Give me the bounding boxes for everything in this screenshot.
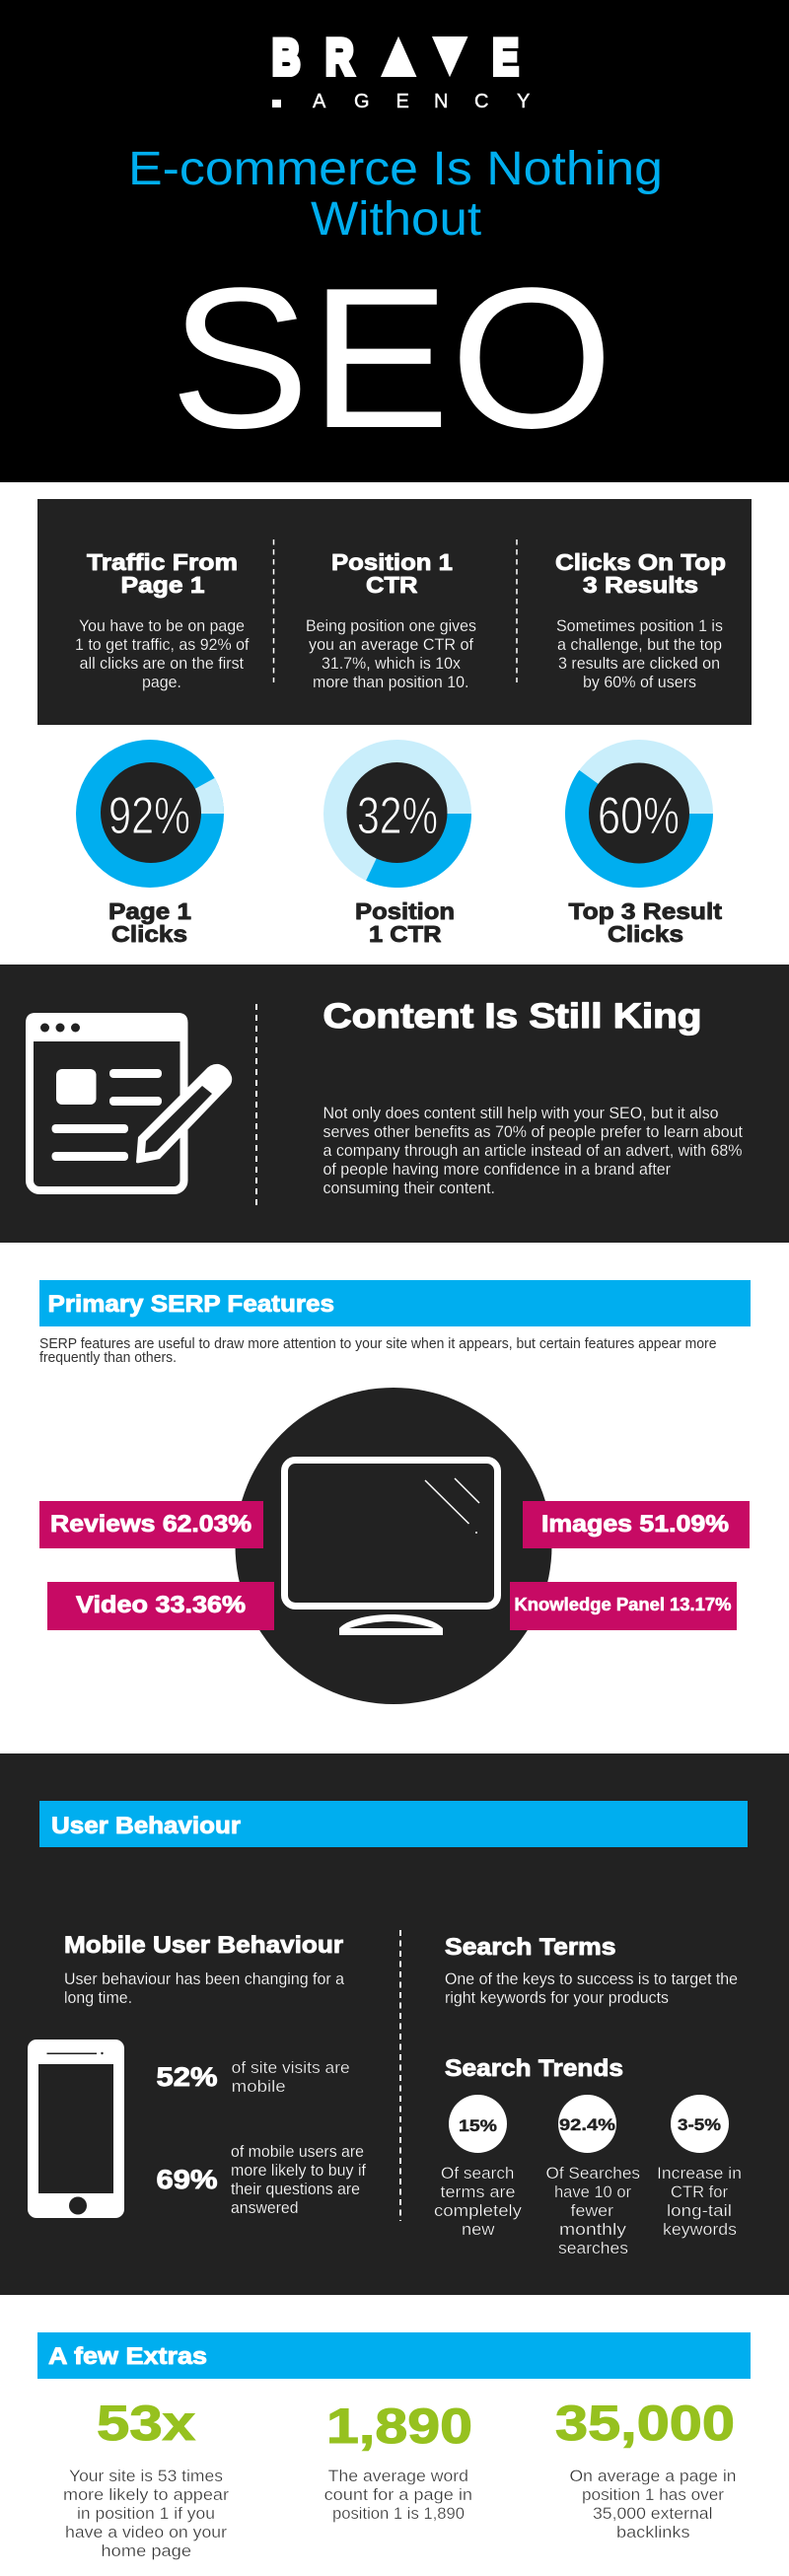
heading band: Primary SERP Features xyxy=(47,1291,334,1318)
stat: 1,890: The average word xyxy=(328,2467,468,2485)
column: position 1 ctr: CTR xyxy=(366,572,418,598)
trend: 3-5%: Increase in xyxy=(657,2164,742,2182)
title: Without xyxy=(311,192,482,246)
stat: 1,890: count for a page in xyxy=(324,2485,472,2504)
block: mobile user behaviour xyxy=(64,1932,344,2007)
text: content body xyxy=(323,1104,743,1197)
column: position 1 ctr xyxy=(306,549,476,691)
panel: user behaviour xyxy=(0,1753,789,2295)
icon: monitor in circle xyxy=(235,1388,552,1704)
column: position 1 ctr: Position 1 xyxy=(331,549,453,575)
chart: donut 32%: 32% xyxy=(357,787,438,845)
column: traffic from page 1: page. xyxy=(142,673,181,691)
chart: donut 92% xyxy=(76,740,224,888)
text: content body: consuming their content. xyxy=(323,1179,495,1197)
heading band xyxy=(39,1801,748,1847)
chart: donut 60%: 60% xyxy=(598,787,680,845)
trend: 92.4%: searches xyxy=(558,2239,628,2257)
logo: Brave Agency: BRAVE xyxy=(272,30,518,86)
column: position 1 ctr: Being position one gives xyxy=(306,616,476,635)
stat: 53x: more likely to appear xyxy=(63,2485,229,2504)
block: search terms: One of the keys to success is to target the xyxy=(445,1969,738,1988)
block: search terms: right keywords for your products xyxy=(445,1988,669,2007)
column: traffic from page 1: 1 to get traffic, as 92% of xyxy=(75,635,250,654)
chart: donut 32% xyxy=(323,740,471,888)
logo: Brave Agency xyxy=(272,36,531,108)
block: mobile user behaviour: User behaviour has been changing for a xyxy=(64,1969,344,1988)
block: search terms xyxy=(445,1934,738,2007)
label: top 3 result clicks xyxy=(568,898,722,947)
stat: 52%: of site visits are xyxy=(232,2058,350,2077)
text: serp intro: SERP features are useful to draw more attention to your site when it appears, but certain features appear more xyxy=(39,1336,716,1352)
stat: 52% xyxy=(156,2058,350,2096)
heading band: User Behaviour xyxy=(51,1813,241,1839)
stat: 52%: 52% xyxy=(156,2062,217,2092)
stat: 69%: of mobile users are xyxy=(231,2142,364,2161)
column: clicks on top 3 results: Sometimes position 1 is xyxy=(556,616,723,635)
trend: 15%: terms are xyxy=(440,2182,515,2201)
stat: 69%: answered xyxy=(231,2198,298,2217)
trend: 92.4% xyxy=(546,2095,640,2257)
panel: a few extras xyxy=(37,2332,751,2560)
stat: 69%: 69% xyxy=(156,2165,217,2194)
column: traffic from page 1: You have to be on page xyxy=(79,616,245,635)
icon: phone xyxy=(28,2039,124,2218)
text: content body: of people having more confidence in a brand after xyxy=(323,1160,671,1179)
trend: 92.4%: monthly xyxy=(559,2220,627,2239)
column: clicks on top 3 results: 3 results are clicked on xyxy=(558,654,720,673)
label: top 3 result clicks: Top 3 Result xyxy=(568,898,722,924)
stat: 53x: in position 1 if you xyxy=(77,2504,215,2523)
stat: 53x xyxy=(63,2396,229,2560)
heading: content is still king: Content Is Still King xyxy=(323,997,702,1036)
trend: 3-5%: 3-5% xyxy=(678,2115,721,2134)
stat: 69% xyxy=(156,2142,366,2217)
trend: 15%: Of search xyxy=(441,2164,515,2182)
icon: web page with pencil xyxy=(26,1013,232,1190)
trend: 92.4%: Of Searches xyxy=(546,2164,640,2182)
heading: search trends: Search Trends xyxy=(445,2055,623,2082)
label: position 1 ctr: 1 CTR xyxy=(369,921,442,947)
column: clicks on top 3 results: 3 Results xyxy=(583,572,698,598)
title: E-commerce Is Nothing xyxy=(128,142,663,195)
label: top 3 result clicks: Clicks xyxy=(608,921,683,947)
trend: 92.4%: fewer xyxy=(570,2201,613,2220)
column: traffic from page 1: Page 1 xyxy=(120,572,205,598)
chart: donut 60% xyxy=(565,740,713,888)
callout: video: Video 33.36% xyxy=(76,1592,246,1618)
column: traffic from page 1: Traffic From xyxy=(87,549,238,575)
column: position 1 ctr: 31.7%, which is 10x xyxy=(322,654,461,673)
stat: 35,000: 35,000 external xyxy=(593,2504,712,2523)
stat: 69%: their questions are xyxy=(231,2180,360,2198)
stat: 53x: Your site is 53 times xyxy=(69,2467,223,2485)
callout: knowledge panel: Knowledge Panel 13.17% xyxy=(515,1595,732,1614)
trend: 15%: completely xyxy=(434,2201,523,2220)
stat: 1,890: position 1 is 1,890 xyxy=(332,2504,465,2523)
heading band xyxy=(39,1280,751,1326)
column: traffic from page 1: all clicks are on the first xyxy=(80,654,244,673)
panel: top statistics text xyxy=(37,499,752,725)
column: position 1 ctr: more than position 10. xyxy=(313,673,469,691)
column: clicks on top 3 results xyxy=(555,549,726,691)
stat: 35,000: backlinks xyxy=(616,2523,690,2541)
heading band: A few Extras xyxy=(48,2343,207,2370)
callout: images: Images 51.09% xyxy=(541,1511,729,1538)
stat: 69%: more likely to buy if xyxy=(231,2161,366,2180)
callout: knowledge panel xyxy=(510,1582,737,1630)
trend: 3-5%: CTR for xyxy=(671,2182,728,2201)
stat: 35,000: position 1 has over xyxy=(582,2485,724,2504)
trend: 15% xyxy=(434,2095,523,2239)
column: position 1 ctr: you an average CTR of xyxy=(309,635,473,654)
label: page 1 clicks: Clicks xyxy=(111,921,187,947)
chart: donut 92%: 92% xyxy=(108,787,190,845)
column: clicks on top 3 results: a challenge, but the top xyxy=(557,635,722,654)
panel: content is still king xyxy=(0,965,789,1243)
label: page 1 clicks xyxy=(108,898,191,947)
stat: 53x: have a video on your xyxy=(65,2523,227,2541)
stat: 35,000 xyxy=(555,2396,736,2541)
stat: 1,890: 1,890 xyxy=(326,2398,472,2454)
callout: reviews: Reviews 62.03% xyxy=(50,1511,251,1538)
headline: SEO: SEO xyxy=(170,247,613,470)
heading band xyxy=(37,2332,751,2379)
text: content body: serves other benefits as 70% of people prefer to learn about xyxy=(323,1122,743,1141)
panel: header xyxy=(0,0,789,482)
label: position 1 ctr: Position xyxy=(355,898,455,924)
panel: primary serp features xyxy=(39,1280,751,1704)
trend: 3-5% xyxy=(657,2095,742,2239)
callout: reviews xyxy=(39,1501,263,1548)
trend: 15%: 15% xyxy=(459,2116,497,2135)
logo: Brave Agency: AGENCY xyxy=(313,91,530,112)
trend: 3-5%: long-tail xyxy=(667,2201,732,2220)
stat: 53x: 53x xyxy=(97,2396,195,2451)
column: traffic from page 1 xyxy=(75,549,250,691)
title xyxy=(128,142,663,246)
trend: 92.4%: 92.4% xyxy=(559,2115,615,2134)
callout: video xyxy=(47,1582,274,1630)
label: position 1 ctr xyxy=(355,898,455,947)
stat: 1,890 xyxy=(324,2398,472,2523)
block: search terms: Search Terms xyxy=(445,1934,615,1961)
stat: 53x: home page xyxy=(101,2541,191,2560)
trend: 15%: new xyxy=(462,2220,495,2239)
trend: 3-5%: keywords xyxy=(663,2220,737,2239)
stat: 52%: mobile xyxy=(232,2077,286,2096)
text: serp intro: frequently than others. xyxy=(39,1350,177,1366)
stat: 35,000: 35,000 xyxy=(555,2396,735,2451)
block: mobile user behaviour: long time. xyxy=(64,1988,132,2007)
trend: 92.4%: have 10 or xyxy=(554,2182,631,2201)
callout: images xyxy=(523,1501,750,1548)
text: content body: a company through an article instead of an advert, with 68% xyxy=(323,1141,742,1160)
block: mobile user behaviour: Mobile User Behaviour xyxy=(64,1932,343,1959)
column: clicks on top 3 results: Clicks On Top xyxy=(555,549,726,575)
label: page 1 clicks: Page 1 xyxy=(108,898,191,924)
column: clicks on top 3 results: by 60% of users xyxy=(583,673,696,691)
text: serp intro xyxy=(39,1336,716,1366)
stat: 35,000: On average a page in xyxy=(570,2467,736,2485)
text: content body: Not only does content still help with your SEO, but it also xyxy=(323,1104,718,1122)
